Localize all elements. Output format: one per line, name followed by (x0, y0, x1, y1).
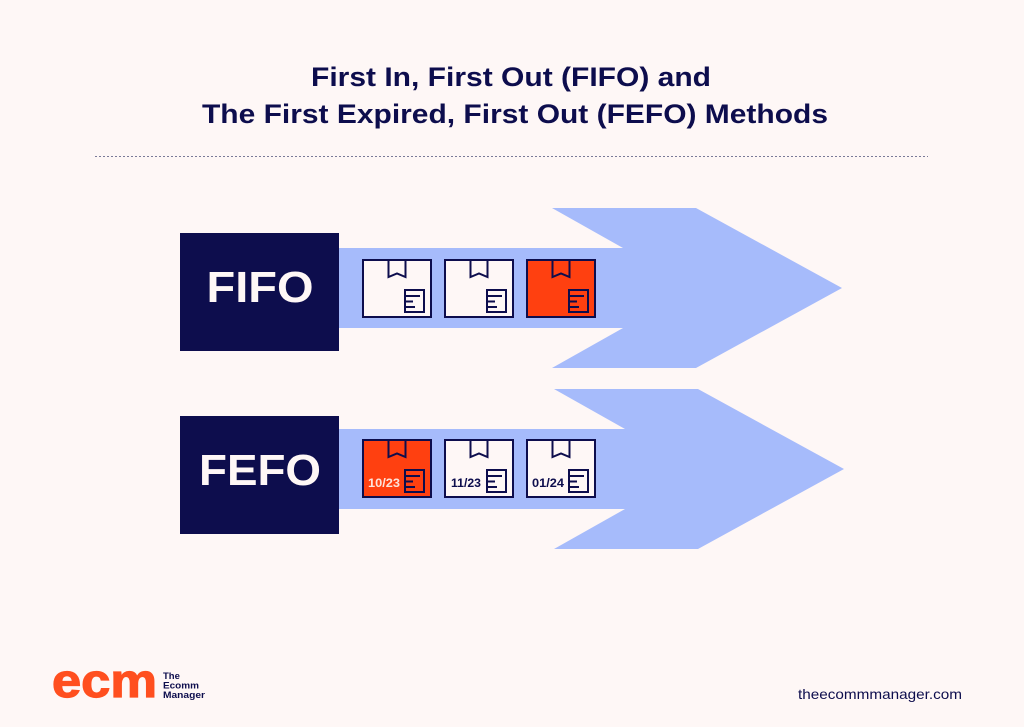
title (202, 62, 828, 129)
logo: ecm The Ecomm Manager (52, 654, 205, 707)
title: First In, First Out (FIFO) and (311, 62, 711, 92)
panel: FEFO row (180, 389, 844, 549)
label: FIFO (180, 233, 339, 351)
arrow: FEFO (339, 389, 844, 549)
label: FEFO: FEFO (199, 446, 321, 495)
icon: box 1 (363, 260, 431, 317)
title: The First Expired, First Out (FEFO) Methods (202, 99, 828, 129)
footer url: theecommmanager.com (798, 686, 962, 702)
logo: ecm The Ecomm Manager: Ecomm (163, 680, 199, 692)
logo: ecm The Ecomm Manager: The (163, 671, 180, 682)
panel: FIFO row (180, 208, 842, 368)
icon: box dated 01/24 (527, 440, 595, 497)
logo: ecm The Ecomm Manager: Manager (163, 690, 205, 701)
label: FIFO: FIFO (206, 263, 314, 312)
icon: box 3 highlighted (527, 260, 595, 317)
arrow: FIFO (339, 208, 842, 368)
icon: box dated 01/24: 01/24 (532, 478, 565, 490)
icon: box dated 10/23 (363, 440, 431, 497)
logo: ecm The Ecomm Manager: ecm (52, 654, 157, 707)
icon: box dated 11/23: 11/23 (451, 478, 481, 490)
icon: box dated 10/23: 10/23 (368, 478, 400, 490)
label: FEFO (180, 416, 339, 534)
icon: box dated 11/23 (445, 440, 513, 497)
icon: box 2 (445, 260, 513, 317)
